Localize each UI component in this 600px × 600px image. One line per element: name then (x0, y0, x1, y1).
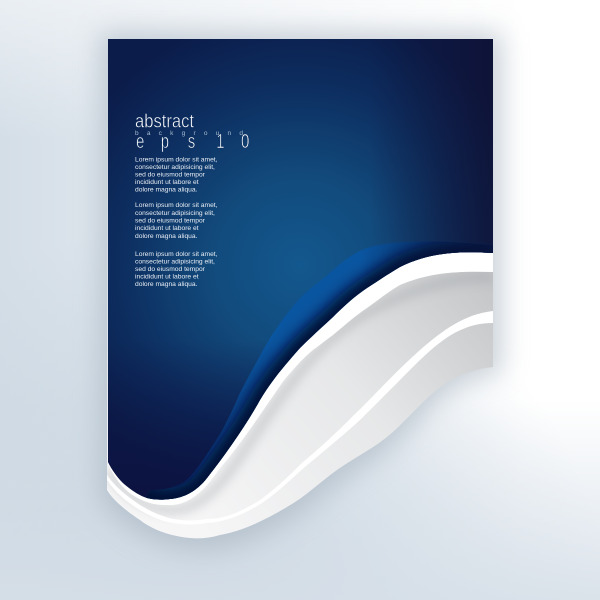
blue wave (146, 242, 493, 500)
text block 1: dolore magna aliqua. (135, 186, 198, 194)
navy panel (108, 39, 493, 520)
paper drop shadow (100, 32, 502, 550)
eps 10: eps10 (136, 130, 249, 153)
text block 2: Lorem ipsum dolor sit amet, (135, 202, 218, 209)
text block 2: consectetur adipisicing elit, (135, 210, 215, 217)
gray paper surface (107, 102, 493, 538)
text block 2: dolore magna aliqua. (135, 233, 198, 240)
text block 2: incididunt ut labore et (135, 225, 199, 232)
soft shadow under white band (108, 277, 493, 510)
text block 3: dolore magna aliqua. (135, 281, 198, 288)
text block 3: incididunt ut labore et (135, 274, 199, 280)
abstract: abstract (135, 112, 195, 132)
text block 3: sed do eiusmod tempor (135, 266, 206, 273)
second white stripe (107, 311, 493, 524)
white band (108, 252, 493, 505)
text block 1: Lorem ipsum dolor sit amet, (135, 156, 218, 164)
text block 2: sed do eiusmod tempor (135, 218, 206, 224)
text block 3: consectetur adipisicing elit, (135, 258, 215, 266)
text block 3: Lorem ipsum dolor sit amet, (135, 251, 218, 258)
text block 1: consectetur adipisicing elit, (135, 164, 215, 171)
text block 1: sed do eiusmod tempor (135, 172, 206, 178)
background: background (135, 130, 243, 137)
paper sheet (100, 39, 493, 549)
title text (135, 112, 249, 153)
text block 1: incididunt ut labore et (135, 179, 199, 186)
